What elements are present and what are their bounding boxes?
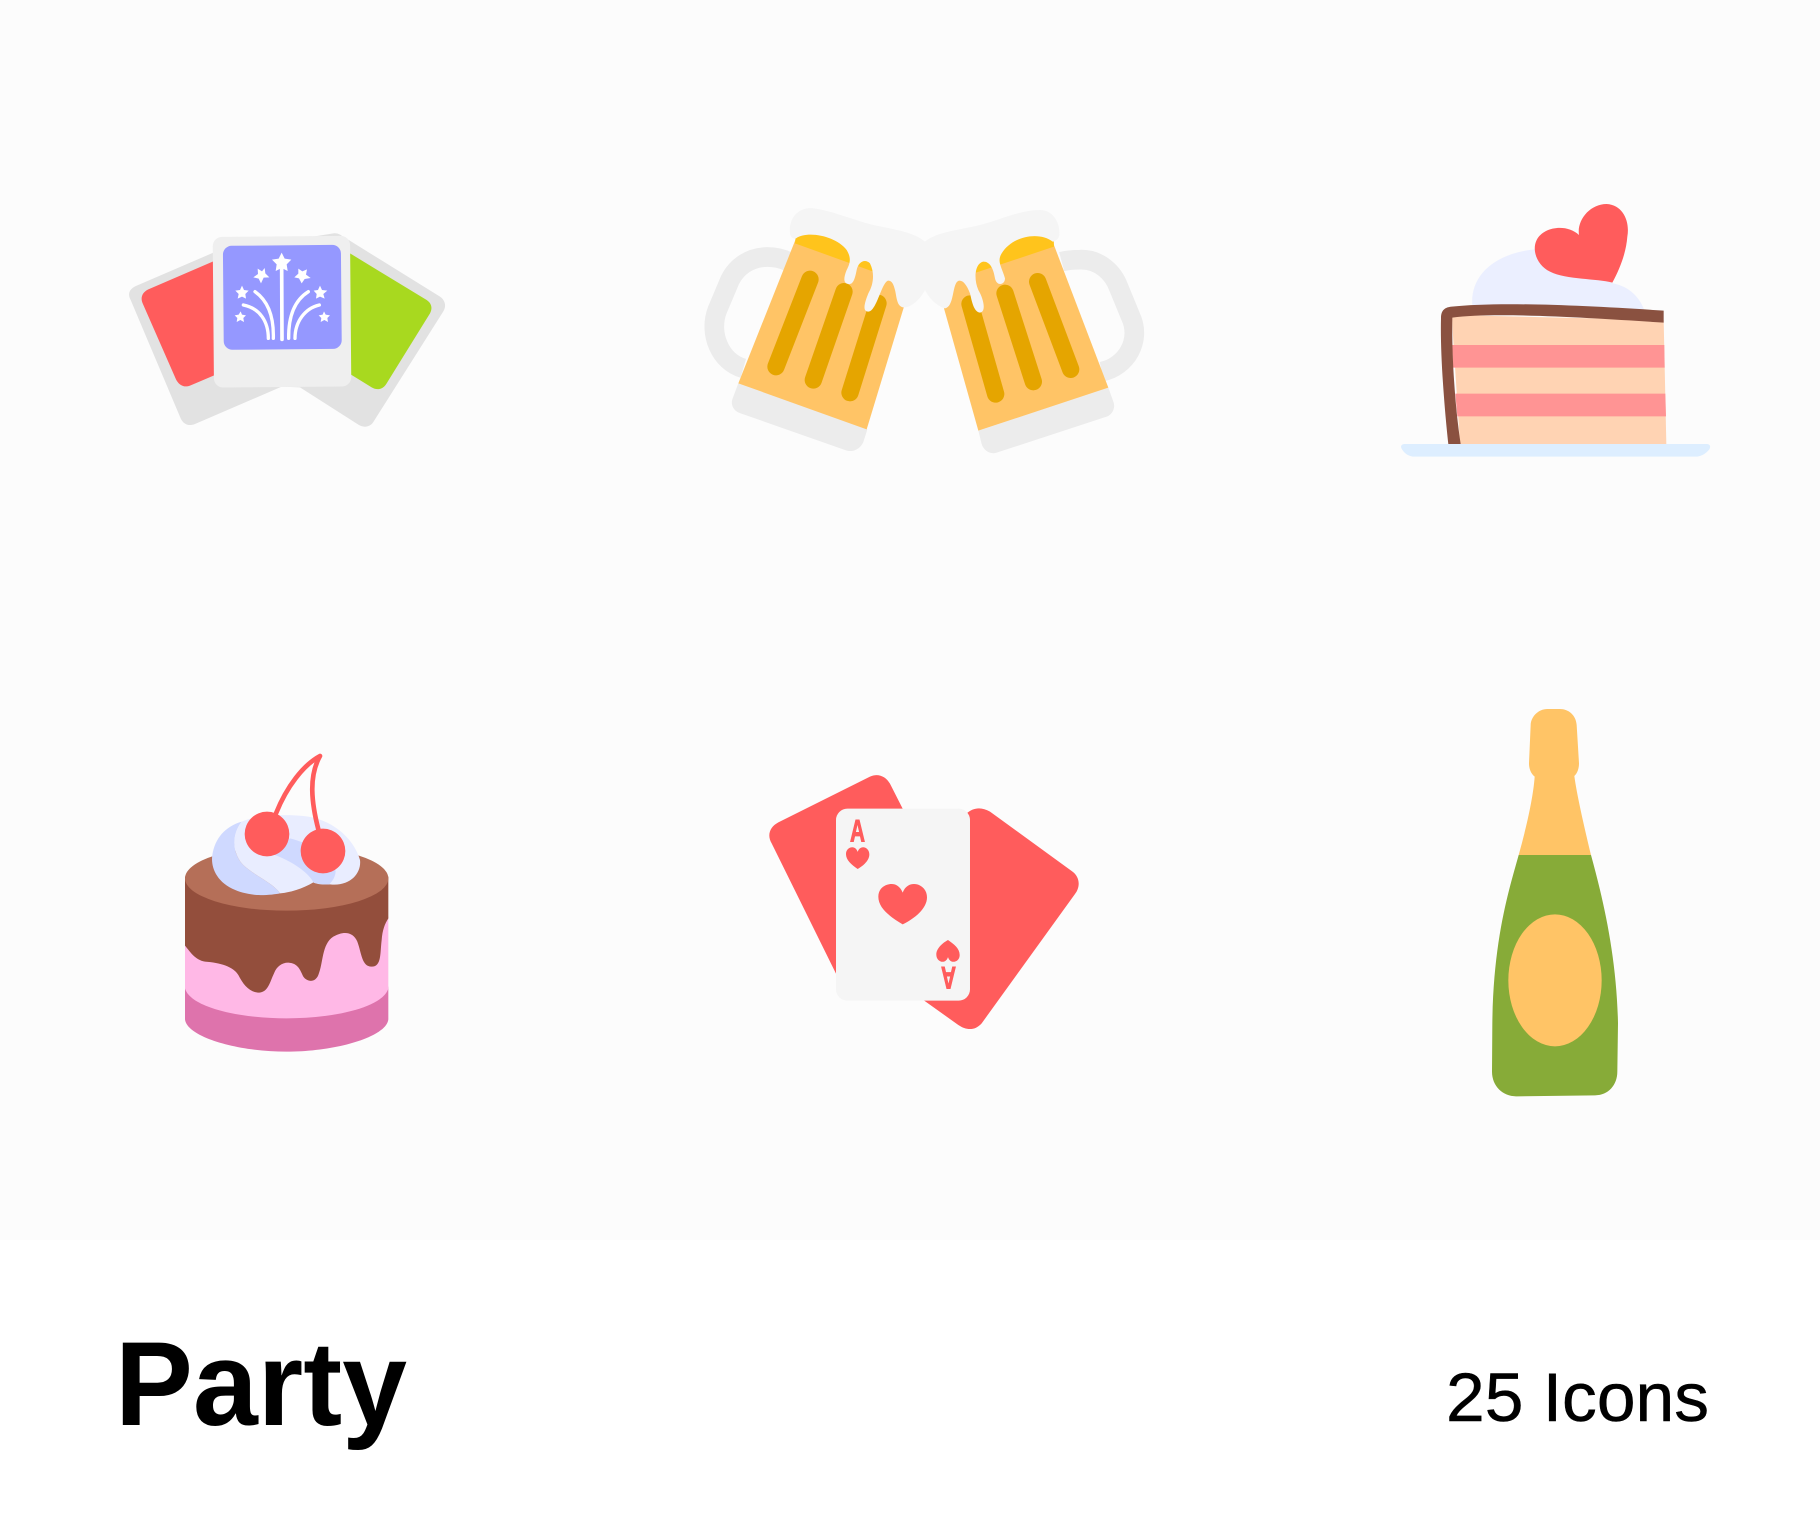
icon: chocolate cherry cake (185, 756, 388, 1052)
card letter bottom: A (941, 960, 956, 995)
mug handles (714, 257, 1134, 372)
back card right (923, 808, 1079, 1029)
cream (1472, 249, 1644, 309)
back card left (769, 775, 903, 975)
front card (836, 809, 970, 1001)
whipped cream (212, 822, 280, 895)
icon: clinking beer mugs (714, 208, 1134, 453)
icon: cake slice with heart (1401, 204, 1710, 457)
bottle body (1492, 855, 1618, 1096)
chocolate drip (185, 877, 388, 993)
icon count: 25 Icons (1446, 1359, 1709, 1436)
hearts (846, 847, 960, 962)
foam (790, 208, 1059, 313)
sponge layers (1452, 315, 1666, 444)
crust (1441, 304, 1664, 444)
cherries (276, 756, 320, 829)
beer surface (795, 227, 880, 272)
bottle label (1508, 914, 1602, 1046)
beer (738, 238, 907, 429)
heart (1535, 204, 1628, 283)
bottom layer (185, 987, 388, 1052)
bottle neck (1519, 709, 1591, 855)
pink layer (185, 917, 388, 1018)
icon: playing cards (769, 775, 1079, 1029)
mug bases (732, 383, 867, 451)
icon: champagne bottle (1492, 709, 1618, 1096)
bubbles stripes (776, 279, 1071, 394)
cake top (185, 846, 388, 911)
plate (1401, 444, 1710, 457)
card letter top: A (850, 814, 865, 849)
title: Party (115, 1317, 407, 1451)
icon: fireworks photos (129, 233, 445, 427)
